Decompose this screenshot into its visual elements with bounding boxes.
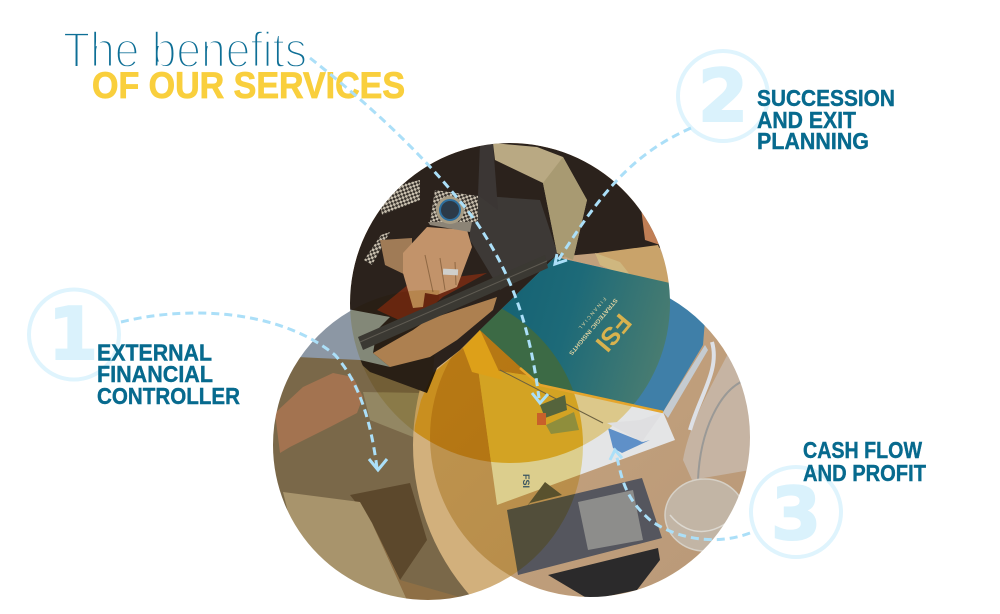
phone case xyxy=(507,478,662,575)
lower hand xyxy=(373,297,497,367)
paper and folder tinted inside top circle xyxy=(463,253,670,461)
blue book xyxy=(480,257,708,418)
wrist hand xyxy=(380,238,412,278)
label 3 xyxy=(803,437,926,486)
main hand xyxy=(403,227,472,308)
folder lettering xyxy=(569,297,632,356)
wristwatch xyxy=(428,196,472,232)
label 2 xyxy=(757,85,895,154)
arrow from title to centre xyxy=(310,58,548,403)
folder lettering: FINANCIAL xyxy=(577,296,607,330)
tint: gold lens over table and paper xyxy=(414,330,583,463)
tablet xyxy=(358,255,548,350)
arrow 2 xyxy=(555,128,691,264)
label 1: FINANCIAL xyxy=(97,361,213,387)
forearm sleeve xyxy=(297,308,390,367)
label 1 xyxy=(97,340,240,409)
checked cuffs xyxy=(430,190,478,222)
wood table background xyxy=(351,143,746,553)
document logo: FSI xyxy=(521,474,531,488)
tint: left and right overlap xyxy=(430,330,583,576)
left figure trousers xyxy=(270,285,470,605)
label 3: CASH FLOW xyxy=(803,437,922,463)
title xyxy=(63,22,405,106)
round table xyxy=(413,356,510,594)
dark seated figures in top circle xyxy=(350,143,669,393)
title line 1: The benefits xyxy=(63,22,307,78)
label 2: AND EXIT xyxy=(757,107,856,133)
red chair xyxy=(377,273,487,320)
blue document corner xyxy=(608,428,650,453)
arrow 3 xyxy=(610,450,750,540)
label 2: PLANNING xyxy=(757,128,869,154)
title line 2: OF OUR SERVICES xyxy=(92,65,405,106)
folder lettering: STRATEGIC INSIGHTS xyxy=(567,297,618,356)
item 2: succession and exit planning xyxy=(555,51,895,264)
beige sofa xyxy=(493,143,587,260)
fist xyxy=(275,373,363,453)
white document xyxy=(478,368,675,505)
table top corner xyxy=(598,245,675,285)
number badge 3 xyxy=(751,467,841,557)
label 1: CONTROLLER xyxy=(97,383,240,409)
label 3: AND PROFIT xyxy=(803,460,926,486)
item 3: cash flow and profit xyxy=(610,437,926,557)
number badge 1: 1 xyxy=(48,292,98,376)
bar chart on document xyxy=(537,395,579,434)
label 2: SUCCESSION xyxy=(757,85,895,111)
page flap outside top circle xyxy=(607,422,642,442)
arrow 1 xyxy=(121,313,387,470)
folder lettering: FSI xyxy=(590,308,637,357)
label 1: EXTERNAL xyxy=(97,340,212,366)
number badge 2: 2 xyxy=(698,54,748,138)
wood in right circle xyxy=(430,340,700,597)
number badge 2 xyxy=(678,51,768,141)
folder in gold overlap xyxy=(480,308,574,391)
item 1: external financial controller xyxy=(29,290,387,470)
tint: faint wash over top and left overlap xyxy=(350,290,440,432)
glass jug xyxy=(665,340,750,551)
number badge 3: 3 xyxy=(771,472,821,556)
black wallet xyxy=(548,548,660,600)
number badge 1 xyxy=(29,290,119,380)
folder edge and paper crease xyxy=(500,368,663,423)
photo trio of overlapping circles xyxy=(260,140,760,610)
